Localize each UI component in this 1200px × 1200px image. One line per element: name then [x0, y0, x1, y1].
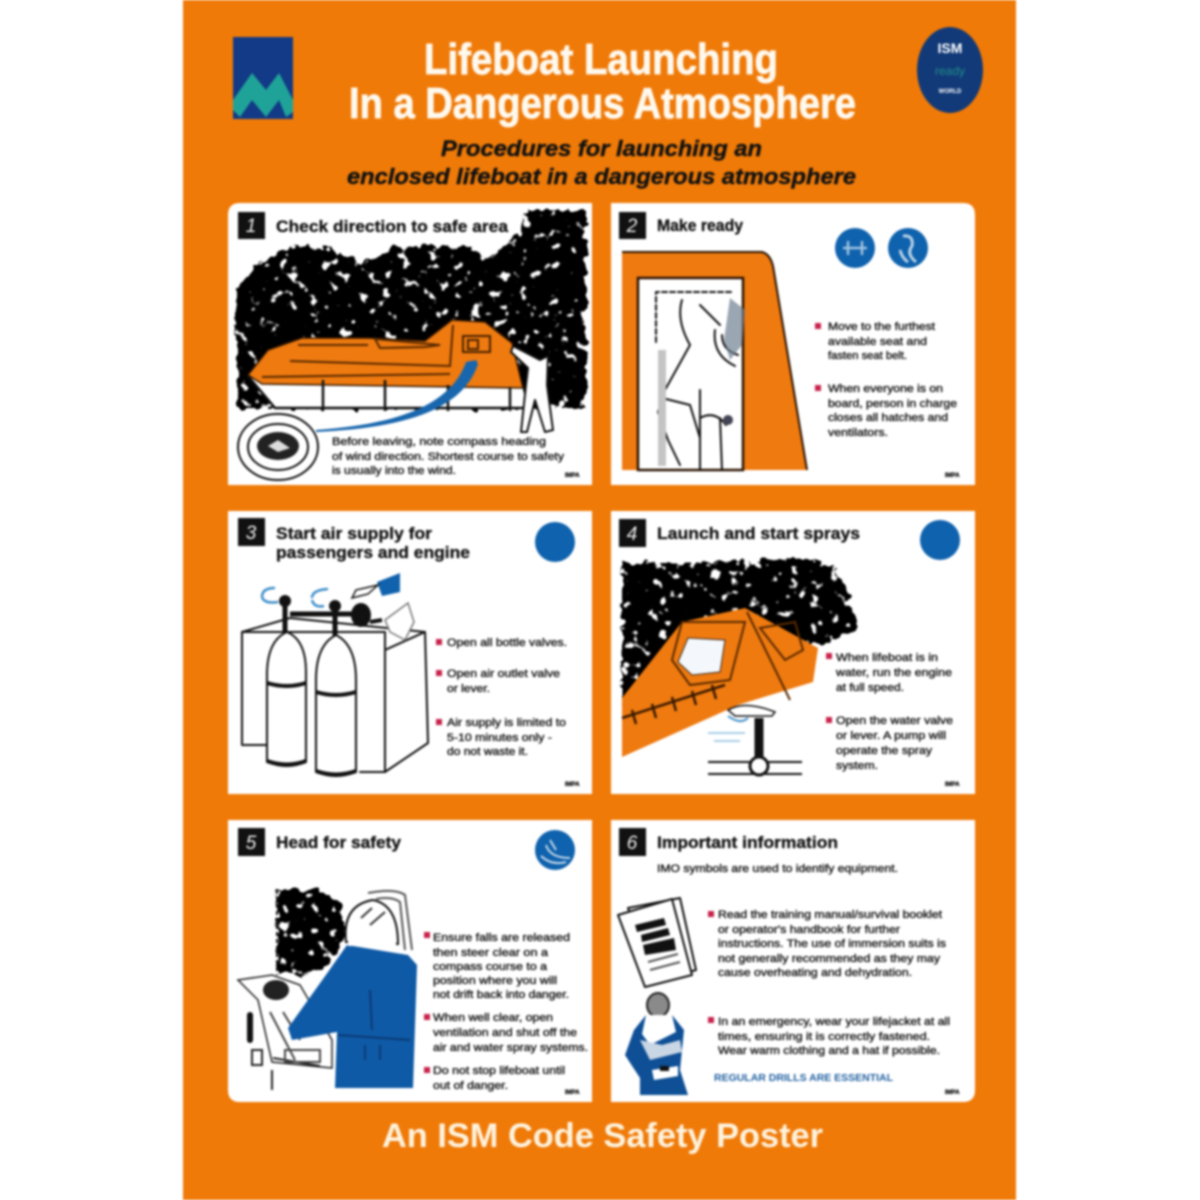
bullets: Open the water valve	[836, 715, 953, 727]
bullets	[826, 652, 953, 772]
icon: blue sign	[535, 522, 575, 562]
bullets: Do not stop lifeboat until	[433, 1065, 565, 1077]
bullets: Open air outlet valve	[447, 668, 560, 680]
number 4	[619, 519, 646, 547]
logo: ISM badge	[917, 27, 983, 113]
bullets: compass course to a	[433, 961, 548, 973]
caption: of wind direction. Shortest course to safety	[332, 451, 565, 463]
caption: is usually into the wind.	[332, 465, 456, 477]
bullets: out of danger.	[433, 1080, 508, 1092]
number 3: 3	[246, 523, 257, 544]
bullets: position where you will	[433, 975, 557, 987]
bullets: Read the training manual/survival booklet	[718, 909, 942, 921]
logo: ISM badge: WORLD	[939, 89, 962, 95]
subtitle: Procedures for launching an	[441, 136, 762, 161]
heading: Head for safety	[276, 833, 402, 852]
number 3	[238, 518, 265, 546]
bullets: operate the spray	[836, 745, 933, 757]
blue handle	[352, 573, 400, 598]
bullets: system.	[836, 760, 878, 772]
heading: Important information	[657, 833, 838, 852]
blue arrow	[316, 360, 478, 432]
number 1: 1	[246, 216, 256, 237]
person	[656, 292, 745, 470]
icon: blue sign	[920, 520, 960, 560]
spray valve and pipe	[708, 705, 802, 775]
bullets: times, ensuring it is correctly fastened.	[718, 1031, 930, 1043]
lifeboat	[622, 608, 818, 757]
panel 2: make ready	[611, 203, 975, 485]
handrail	[368, 891, 412, 950]
heading: Launch and start sprays	[657, 524, 860, 543]
logo: ISM badge: ready	[935, 64, 965, 78]
bullets: or operator's handbook for further	[718, 924, 900, 936]
bullets: not drift back into danger.	[433, 989, 569, 1001]
number 6: 6	[627, 833, 638, 854]
bullets: instructions. The use of immersion suits is	[718, 938, 947, 950]
code mark: IMPA	[565, 1090, 580, 1096]
number 1	[238, 212, 265, 239]
logo: publisher	[233, 37, 293, 119]
bullets: fasten seat belt.	[828, 350, 907, 362]
smoke cloud	[236, 210, 586, 408]
panel 6: important information	[611, 820, 975, 1102]
bullets	[815, 321, 957, 439]
bullets	[424, 932, 588, 1092]
heading: Start air supply for	[276, 524, 432, 543]
intro line: IMO symbols are used to identify equipment.	[657, 863, 898, 875]
number 4: 4	[627, 524, 637, 545]
bullets: not generally recommended as they may	[718, 953, 941, 965]
pipework and valves	[262, 588, 414, 640]
panel 1: check direction	[228, 203, 592, 485]
bullets: When lifeboat is in	[836, 652, 938, 664]
bottle 1	[267, 595, 306, 766]
number 5	[238, 828, 265, 856]
icon: assembly signs	[835, 228, 875, 268]
bullets: air and water spray systems.	[433, 1042, 588, 1054]
heading: Make ready	[657, 216, 743, 235]
bullets: ventilators.	[828, 427, 888, 439]
bullets: When well clear, open	[433, 1012, 553, 1024]
bullets: When everyone is on	[828, 383, 943, 395]
subtitle: enclosed lifeboat in a dangerous atmosphere	[347, 164, 856, 189]
training manual	[618, 898, 696, 987]
bullets: do not waste it.	[447, 746, 528, 758]
code mark: IMPA	[945, 782, 960, 788]
bullets: board, person in charge	[828, 398, 957, 410]
bullets: Wear warm clothing and a hat if possible.	[718, 1045, 940, 1057]
icon: seat belt sign	[888, 228, 928, 268]
air bottle rack	[242, 618, 428, 772]
code mark: IMPA	[565, 473, 580, 479]
title: Lifeboat Launching	[424, 35, 778, 84]
bullets: Move to the furthest	[828, 321, 935, 333]
person	[511, 346, 553, 432]
title: In a Dangerous Atmosphere	[349, 79, 856, 128]
bullets: or lever. A pump will	[836, 730, 946, 742]
orange poster background	[183, 0, 1016, 1200]
bullets: or lever.	[447, 683, 490, 695]
callout: drills: REGULAR DRILLS ARE ESSENTIAL	[714, 1073, 893, 1084]
bullets	[436, 637, 567, 758]
panel 5: head for safety	[228, 820, 592, 1102]
bullets: then steer clear on a	[433, 947, 549, 959]
smoke cloud	[622, 558, 855, 705]
bottle 2	[316, 600, 356, 776]
panel 4: launch and sprays	[611, 511, 975, 794]
bullets: Open all bottle valves.	[447, 637, 567, 649]
bullets: 5-10 minutes only -	[447, 732, 552, 744]
icon: blue sign	[535, 830, 575, 870]
bullets: available seat and	[828, 336, 927, 348]
heading: passengers and engine	[276, 543, 470, 562]
number 2: 2	[626, 216, 638, 237]
bullets: In an emergency, wear your lifejacket at all	[718, 1016, 950, 1028]
caption	[332, 436, 565, 477]
bullets: ventilation and shut off the	[433, 1027, 577, 1039]
number 5: 5	[246, 833, 257, 854]
code mark: IMPA	[945, 1090, 960, 1096]
control console	[238, 975, 332, 1090]
number 2	[619, 212, 646, 239]
bullets: at full speed.	[836, 682, 904, 694]
helmsman	[288, 900, 417, 1088]
bullets: Air supply is limited to	[447, 717, 566, 729]
bullets	[708, 909, 950, 1057]
code mark: IMPA	[945, 473, 960, 479]
heading	[276, 524, 470, 562]
bullets: Ensure falls are released	[433, 932, 570, 944]
bullets: closes all hatches and	[828, 412, 948, 424]
title	[349, 35, 856, 128]
subtitle	[347, 136, 856, 189]
code mark: IMPA	[565, 782, 580, 788]
bullets: cause overheating and dehydration.	[718, 967, 912, 979]
compass	[238, 414, 318, 480]
logo: ISM badge: ISM	[938, 40, 962, 56]
lifeboat	[248, 320, 528, 411]
caption: Before leaving, note compass heading	[332, 436, 546, 448]
number 6	[619, 828, 646, 856]
footer: An ISM Code Safety Poster	[382, 1117, 823, 1155]
window with smoke	[277, 890, 344, 975]
panel 3: air supply	[228, 511, 592, 794]
heading: Check direction to safe area	[276, 217, 509, 236]
bullets: water, run the engine	[835, 667, 952, 679]
person in lifejacket	[625, 993, 688, 1095]
lifeboat hatch	[622, 252, 807, 470]
